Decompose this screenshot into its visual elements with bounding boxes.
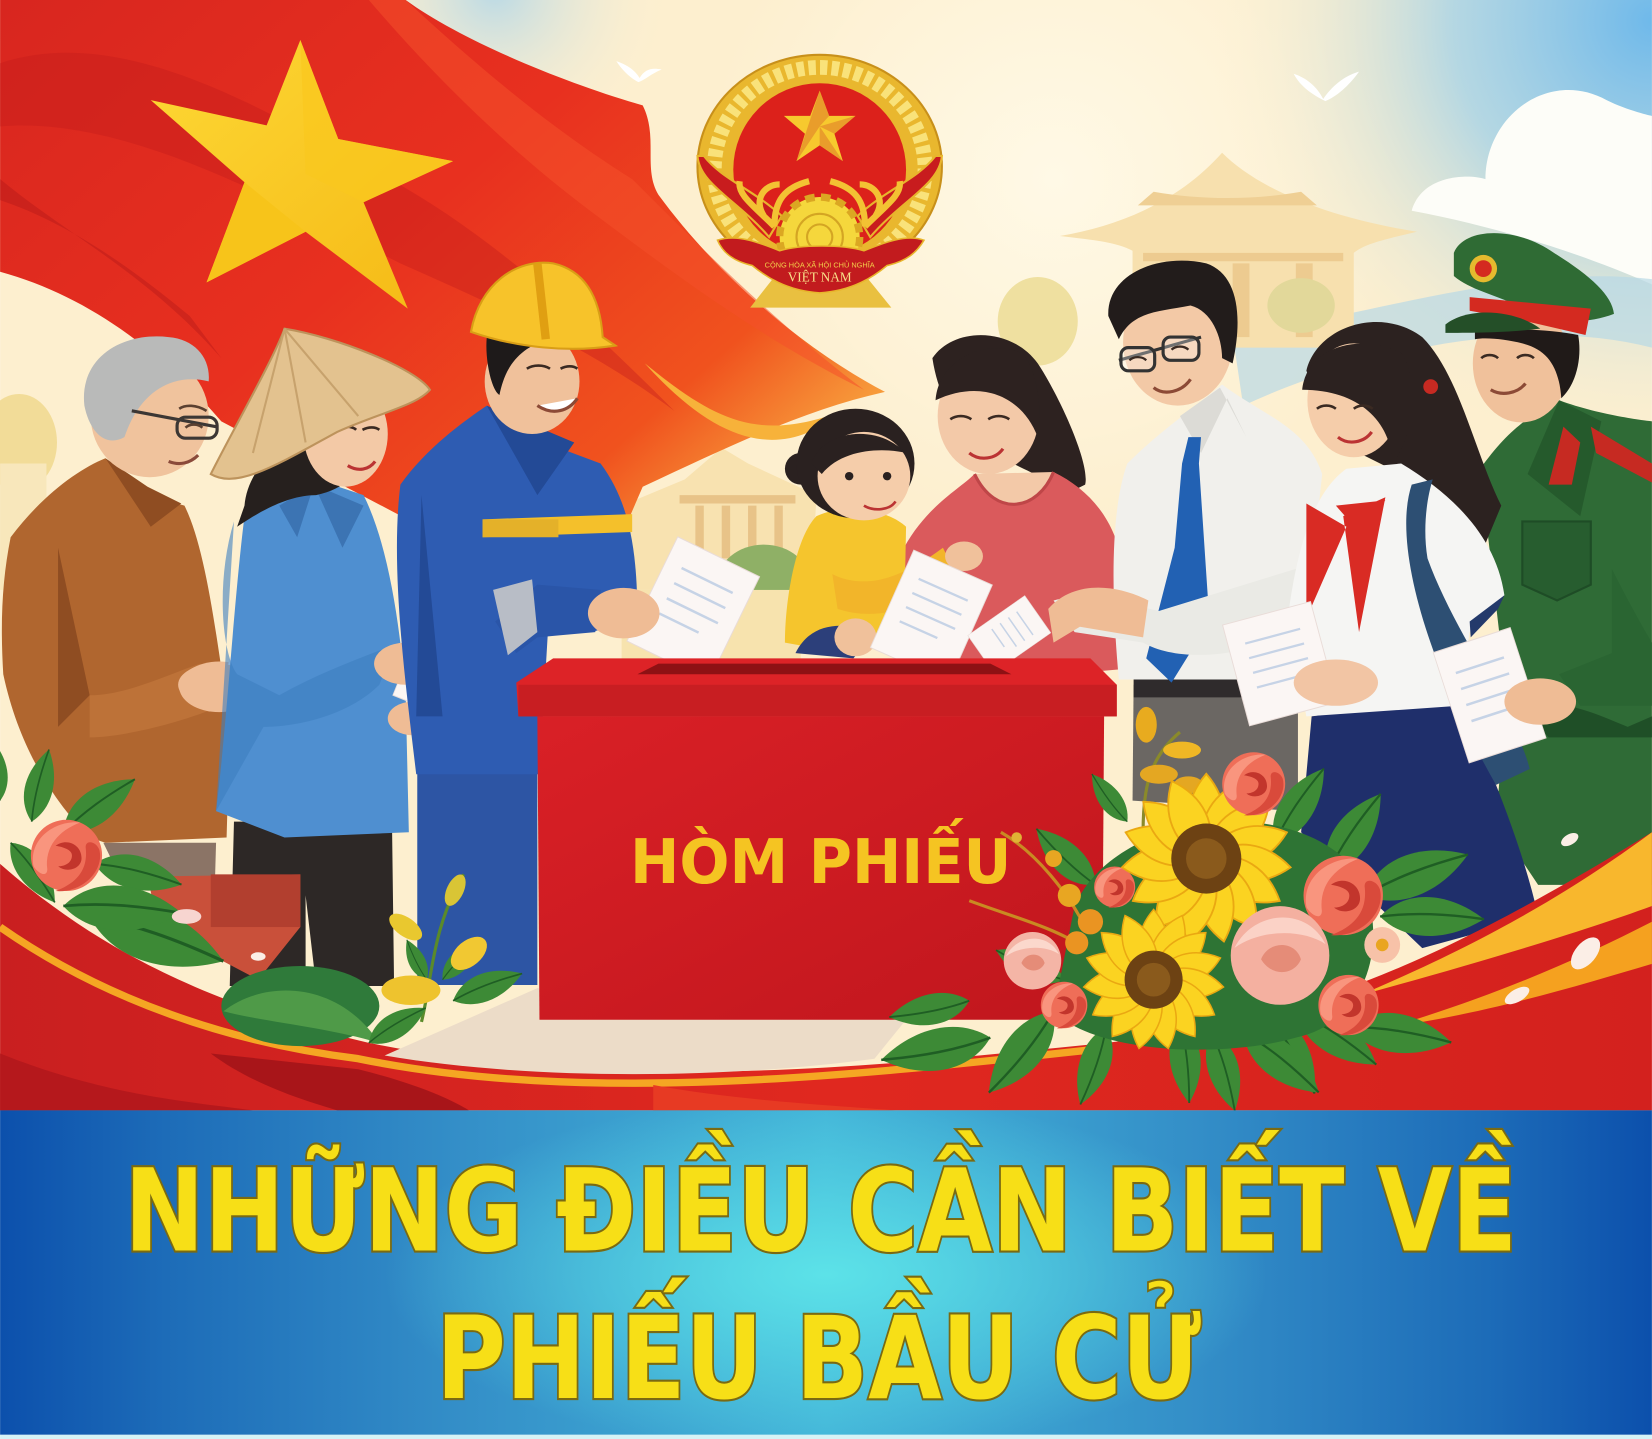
person: man with glasses and tie	[1048, 261, 1322, 811]
ballot box	[516, 658, 1117, 1020]
national emblem	[697, 55, 942, 308]
national emblem: CỘNG HÒA XÃ HỘI CHỦ NGHĨA	[765, 261, 875, 270]
background: pagoda building	[998, 153, 1417, 366]
ballot paper held by woman	[393, 601, 499, 722]
background sky	[0, 0, 1652, 1110]
ballot papers of student	[1223, 602, 1576, 763]
hands of woman	[374, 643, 438, 735]
cloud	[1233, 90, 1652, 406]
title line 2: PHIẾU BẦU CỬ	[436, 1277, 1201, 1425]
falling petals	[172, 830, 1606, 1008]
person: child	[785, 409, 983, 658]
ballot papers of mother and child	[870, 550, 1051, 682]
person: mother	[901, 335, 1125, 674]
yellow sprig left	[362, 871, 527, 1051]
person: elderly man	[2, 336, 259, 880]
hand of worker	[588, 588, 660, 638]
ballot paper held by elderly man	[215, 591, 338, 730]
small red brick box at left	[148, 874, 300, 980]
ballot paper held by worker	[627, 537, 760, 681]
hand of elderly man	[178, 664, 254, 706]
person: construction worker	[397, 263, 637, 985]
ballot box platform	[385, 988, 906, 1074]
title banner	[0, 1110, 1652, 1439]
box label: HÒM PHIẾU	[630, 819, 1011, 898]
background: birds	[616, 61, 1359, 101]
flag	[0, 0, 885, 548]
person: soldier	[1445, 233, 1652, 885]
flag star	[151, 40, 453, 309]
background: left trees	[0, 394, 57, 590]
bottom swoosh ribbons	[0, 832, 1652, 1110]
person: woman with conical hat	[211, 329, 430, 986]
person: student girl	[1243, 322, 1538, 948]
background: memorial building and trees	[622, 448, 817, 664]
flowers left	[0, 742, 379, 1046]
national emblem: VIỆT NAM	[788, 269, 852, 284]
bouquet	[879, 707, 1486, 1114]
